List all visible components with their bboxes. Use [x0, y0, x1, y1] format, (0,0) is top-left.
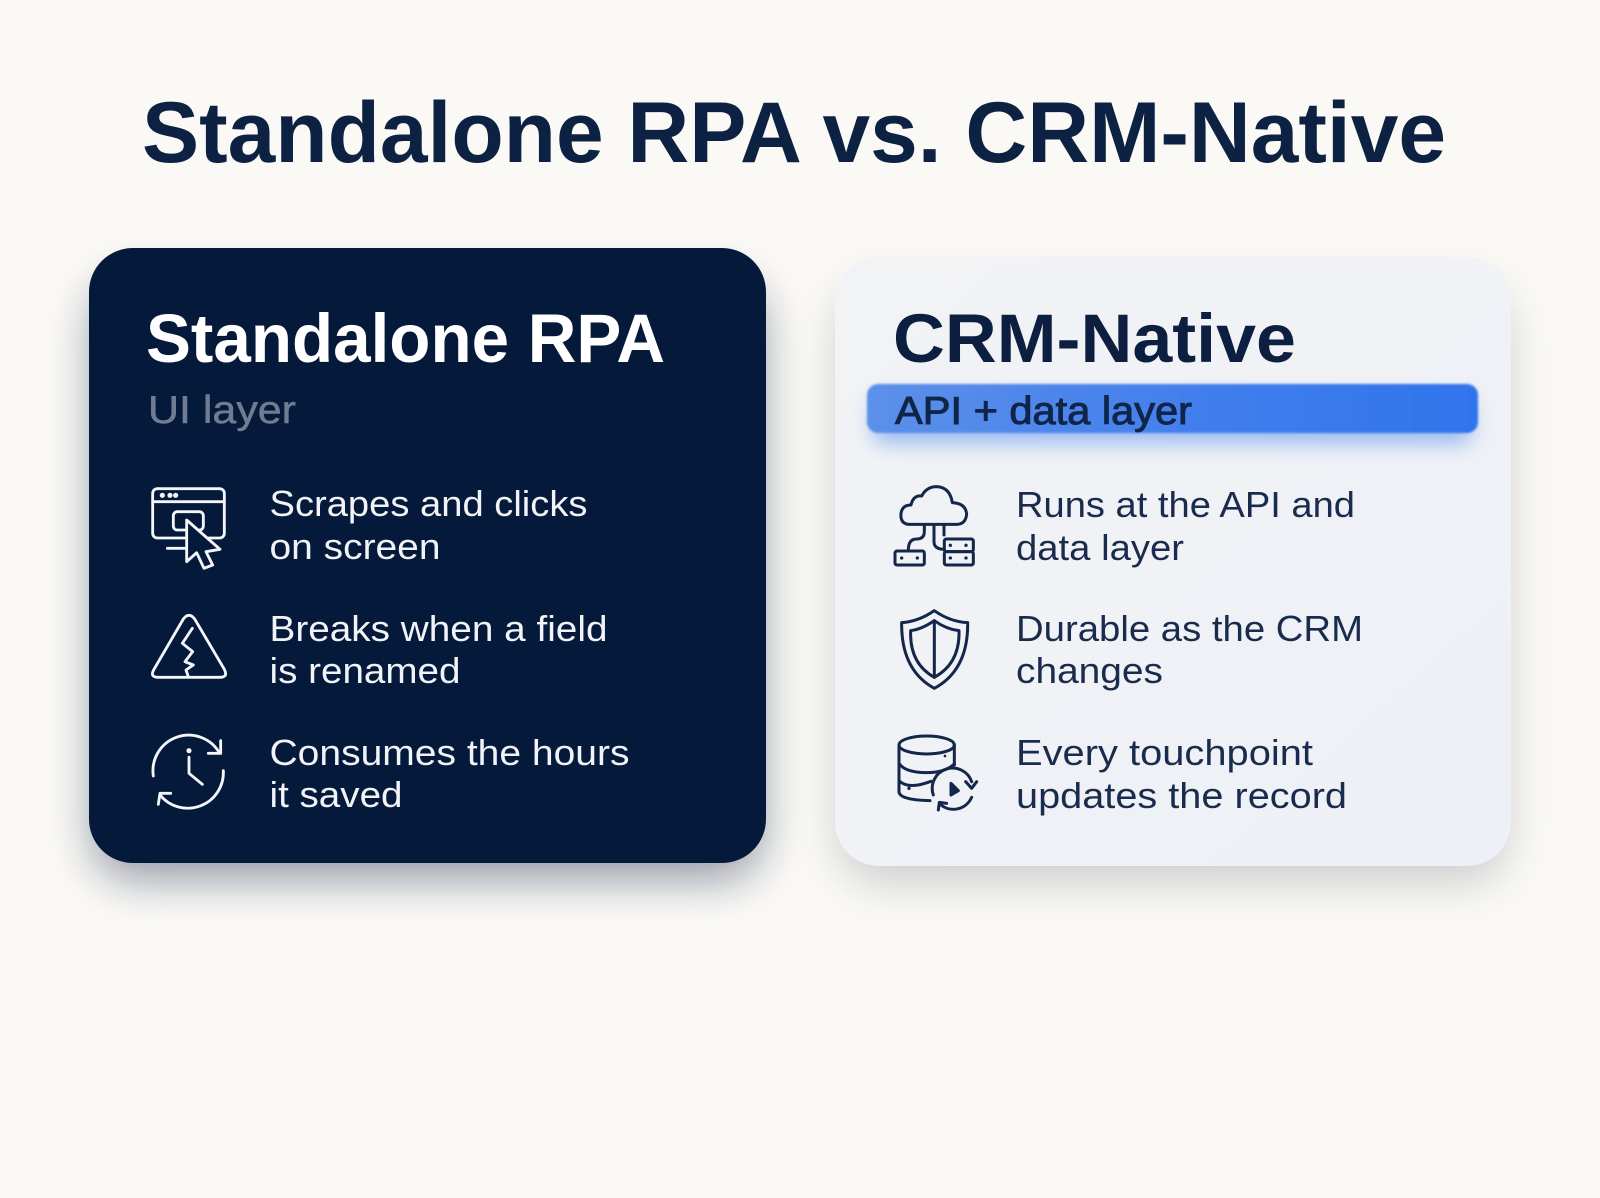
- text: runs at the API: Runs at the API and: [1016, 484, 1355, 525]
- text: scrapes and clicks: on screen: [270, 526, 440, 567]
- panel: standalone RPA: [89, 248, 766, 880]
- text: breaks when a field: Breaks when a field: [270, 608, 608, 649]
- icon: database with sync: [899, 736, 977, 810]
- icon: shield: [902, 611, 968, 688]
- title: Standalone RPA vs. CRM-Native: [142, 85, 1446, 181]
- text: durable as the CRM: [1016, 608, 1363, 691]
- text: consumes the hours: Consumes the hours: [270, 732, 630, 773]
- text: breaks when a field: is renamed: [270, 650, 460, 691]
- highlight bar: API + data layer: API + data layer: [895, 390, 1192, 433]
- heading: standalone RPA: Standalone RPA: [146, 300, 665, 377]
- text: durable as the CRM: Durable as the CRM: [1016, 608, 1363, 649]
- text: runs at the API: data layer: [1016, 527, 1184, 568]
- text: every touchpoint: [1016, 732, 1347, 816]
- text: consumes the hours: it saved: [270, 774, 402, 815]
- icon: warning triangle with crack: [152, 615, 226, 677]
- text: runs at the API: [1016, 484, 1355, 568]
- subheading: UI layer: UI layer: [148, 389, 296, 432]
- text: durable as the CRM: changes: [1016, 650, 1163, 691]
- icon: browser window with cursor: [153, 489, 224, 568]
- text: every touchpoint: updates the record: [1016, 775, 1347, 816]
- icon: cloud with servers: [895, 487, 973, 565]
- highlight bar: API + data layer: [867, 384, 1478, 444]
- text: scrapes and clicks: [270, 483, 588, 567]
- icon: clock with circular arrows: [153, 735, 223, 808]
- heading: CRM-native: CRM-Native: [893, 300, 1296, 377]
- text: breaks when a field: [270, 608, 608, 691]
- panel: CRM-native: [835, 257, 1511, 883]
- text: consumes the hours: [270, 732, 630, 815]
- text: scrapes and clicks: Scrapes and clicks: [270, 483, 588, 524]
- text: every touchpoint: Every touchpoint: [1016, 732, 1313, 773]
